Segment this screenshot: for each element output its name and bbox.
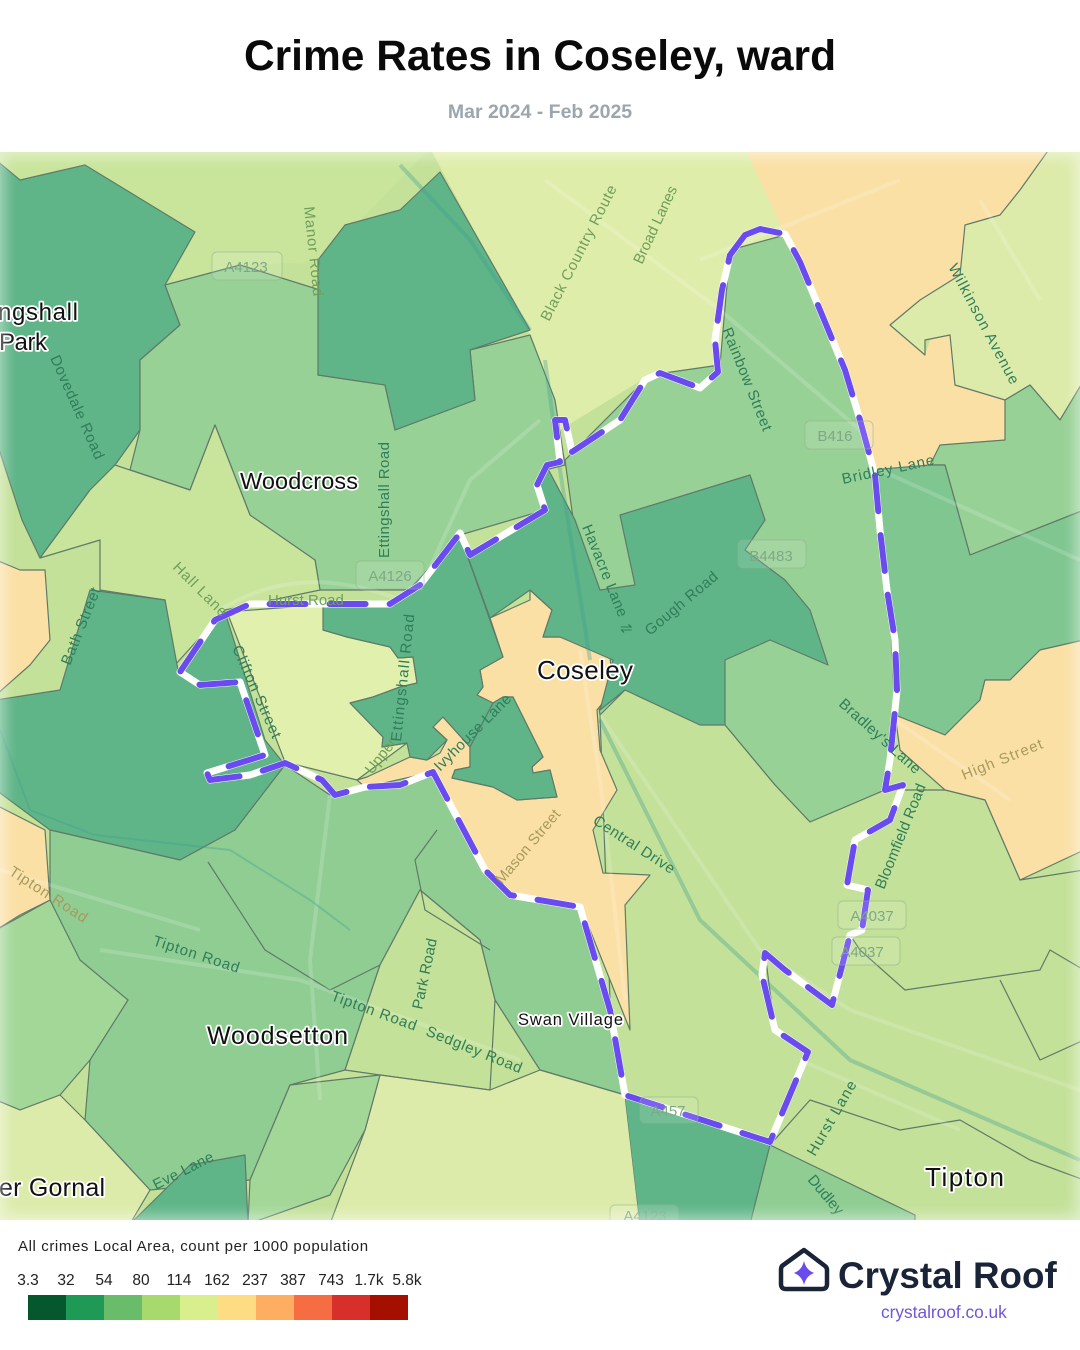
road labels: Ettingshall Road	[376, 442, 393, 558]
legend scale labels: 3.3	[17, 1272, 39, 1289]
road labels: Upper	[362, 735, 400, 777]
road labels: ⇌	[620, 620, 633, 637]
road labels: Central Drive	[590, 812, 678, 878]
place names	[0, 299, 1004, 1202]
title: Crime Rates in Coseley, ward	[244, 33, 836, 80]
road shields: A4126	[368, 568, 412, 585]
road labels: Park Road	[409, 937, 441, 1011]
road labels: Tipton Road	[151, 933, 242, 977]
road labels: Bloomfield Road	[872, 781, 930, 891]
road labels: Havacre Lane	[578, 522, 631, 619]
road labels: High Street	[959, 735, 1046, 784]
place names: Woodsetton	[207, 1022, 348, 1050]
road labels: Gough Road	[642, 568, 722, 639]
map of Coseley ward	[0, 152, 1080, 1220]
legend scale labels: 743	[318, 1272, 344, 1289]
legend scale labels: 5.8k	[392, 1272, 422, 1289]
road labels: Eve Lane	[150, 1148, 217, 1194]
road labels: Tipton Road	[6, 863, 91, 926]
road labels: Bridley Lane	[840, 452, 936, 488]
road labels: Bath Street	[58, 584, 105, 667]
road labels: Bradley's Lane	[835, 695, 924, 778]
road shields: B4483	[749, 548, 793, 565]
road shields: B416	[817, 428, 853, 445]
road labels: Dudley	[804, 1172, 847, 1219]
place names: Park	[0, 329, 48, 356]
road labels: Ivyhouse Lane	[431, 691, 515, 775]
icon: house with star	[778, 1248, 830, 1292]
road labels: Hurst Lane	[804, 1078, 860, 1159]
legend scale labels: 54	[95, 1272, 113, 1289]
road labels: Clifton Street	[228, 643, 285, 742]
place names: er Gornal	[0, 1174, 105, 1202]
place names: ngshall	[0, 299, 78, 326]
legend scale labels: 387	[280, 1272, 306, 1289]
road shields: A4123	[224, 259, 268, 276]
road labels: Wilkinson Avenue	[944, 261, 1022, 387]
road shields	[212, 252, 906, 1233]
place names: Tipton	[925, 1162, 1004, 1192]
road labels: Hall Lane	[169, 559, 231, 620]
legend	[17, 1238, 422, 1320]
legend scale labels: 162	[204, 1272, 230, 1289]
legend title: All crimes Local Area, count per 1000 population	[18, 1238, 369, 1255]
road labels: Hurst Road	[268, 592, 344, 609]
road labels: Mason Street	[492, 806, 565, 888]
road labels: Sedgley Road	[424, 1023, 524, 1077]
place names: Coseley	[537, 655, 633, 685]
legend scale labels: 1.7k	[354, 1272, 384, 1289]
road labels: Manor Road	[300, 206, 326, 297]
road labels: Rainbow Street	[718, 325, 776, 434]
subtitle: date range: Mar 2024 - Feb 2025	[448, 101, 632, 123]
road shields: A457	[650, 1103, 686, 1120]
place names: Woodcross	[240, 468, 358, 494]
choropleth areas	[0, 148, 1080, 1224]
legend scale labels	[17, 1272, 422, 1289]
road labels	[6, 182, 1046, 1219]
logo: Crystal Roof	[778, 1248, 1057, 1322]
road shields: A4037	[850, 908, 894, 925]
road labels: Tipton Road	[329, 988, 419, 1035]
road labels: Dovedale Road	[46, 353, 107, 462]
road labels: Black Country Route	[537, 182, 621, 324]
legend scale labels: 32	[57, 1272, 75, 1289]
legend scale labels: 114	[167, 1272, 192, 1289]
map edge fade	[0, 152, 1080, 1220]
place names: Swan Village	[518, 1011, 623, 1029]
road labels: Broad Lanes	[630, 183, 681, 267]
ward boundary	[180, 229, 903, 1142]
road labels: Ettingshall Road	[388, 613, 418, 742]
legend scale labels: 80	[132, 1272, 150, 1289]
road shields: A4037	[840, 944, 884, 961]
legend scale labels: 237	[242, 1272, 268, 1289]
road network and canal	[0, 180, 1080, 1130]
website link: crystalroof.co.uk	[881, 1302, 1007, 1322]
legend colour bar	[28, 1295, 408, 1320]
wordmark: Crystal Roof	[838, 1255, 1057, 1296]
